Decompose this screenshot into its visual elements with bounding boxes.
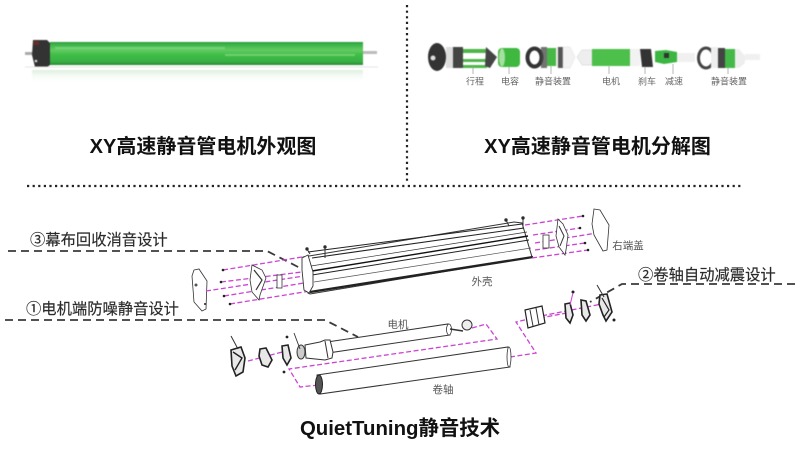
callout: motor end: ①电机端防噪静音设计: [26, 301, 179, 318]
aluminium extrusion: [302, 222, 533, 294]
right pink assembly lines: [525, 215, 603, 258]
heading: QuietTuning: QuietTuning静音技术: [300, 416, 500, 440]
callout: fabric retraction: ③幕布回收消音设计: [30, 232, 168, 249]
right bracket: [556, 219, 568, 255]
heading: exploded view: XY高速静音管电机分解图: [484, 134, 711, 158]
callout: motor end: [5, 301, 358, 337]
left bushing: [277, 275, 282, 288]
dotted dividers: [27, 5, 742, 186]
motor exploded photo: [428, 43, 760, 86]
motor exploded photo: 电容: [501, 76, 519, 86]
left motor-end parts: [231, 336, 291, 376]
callout: roller damping: [590, 267, 795, 302]
callout: roller damping: ②卷轴自动减震设计: [638, 267, 776, 284]
motor exploded photo: 静音装置: [535, 76, 571, 86]
label: right end cap: 右端盖: [612, 239, 644, 252]
motor exploded photo: 静音装置: [711, 76, 747, 86]
callout: fabric retraction: [8, 232, 302, 269]
right roller-end parts: [565, 285, 616, 323]
exploded drawing: outer shell assembly: [192, 209, 644, 311]
pink assembly path: [248, 303, 607, 387]
motor exterior photo: [25, 40, 378, 83]
right end cap: [592, 209, 609, 251]
left bracket: [250, 265, 266, 300]
motor exploded photo: 刹车: [638, 76, 656, 86]
left pink assembly lines: [206, 257, 310, 305]
label: roller: 卷轴: [432, 383, 454, 396]
left end cap: [192, 269, 207, 311]
motor tube: [294, 324, 452, 360]
label: motor: 电机: [388, 318, 409, 331]
right bushing: [543, 235, 549, 248]
motor exploded photo: 电机: [602, 76, 620, 86]
motor exploded photo: 减速: [665, 76, 683, 86]
exploded drawing: motor and roller: [231, 285, 616, 396]
motor exploded photo: 行程: [466, 76, 484, 86]
motor end wheel: [450, 320, 472, 331]
heading: exterior view: XY高速静音管电机外观图: [90, 134, 316, 158]
roller tube: [316, 347, 511, 394]
shell screws: [306, 217, 524, 258]
label: outer shell: 外壳: [472, 275, 493, 288]
roller drive crown: [525, 306, 545, 328]
